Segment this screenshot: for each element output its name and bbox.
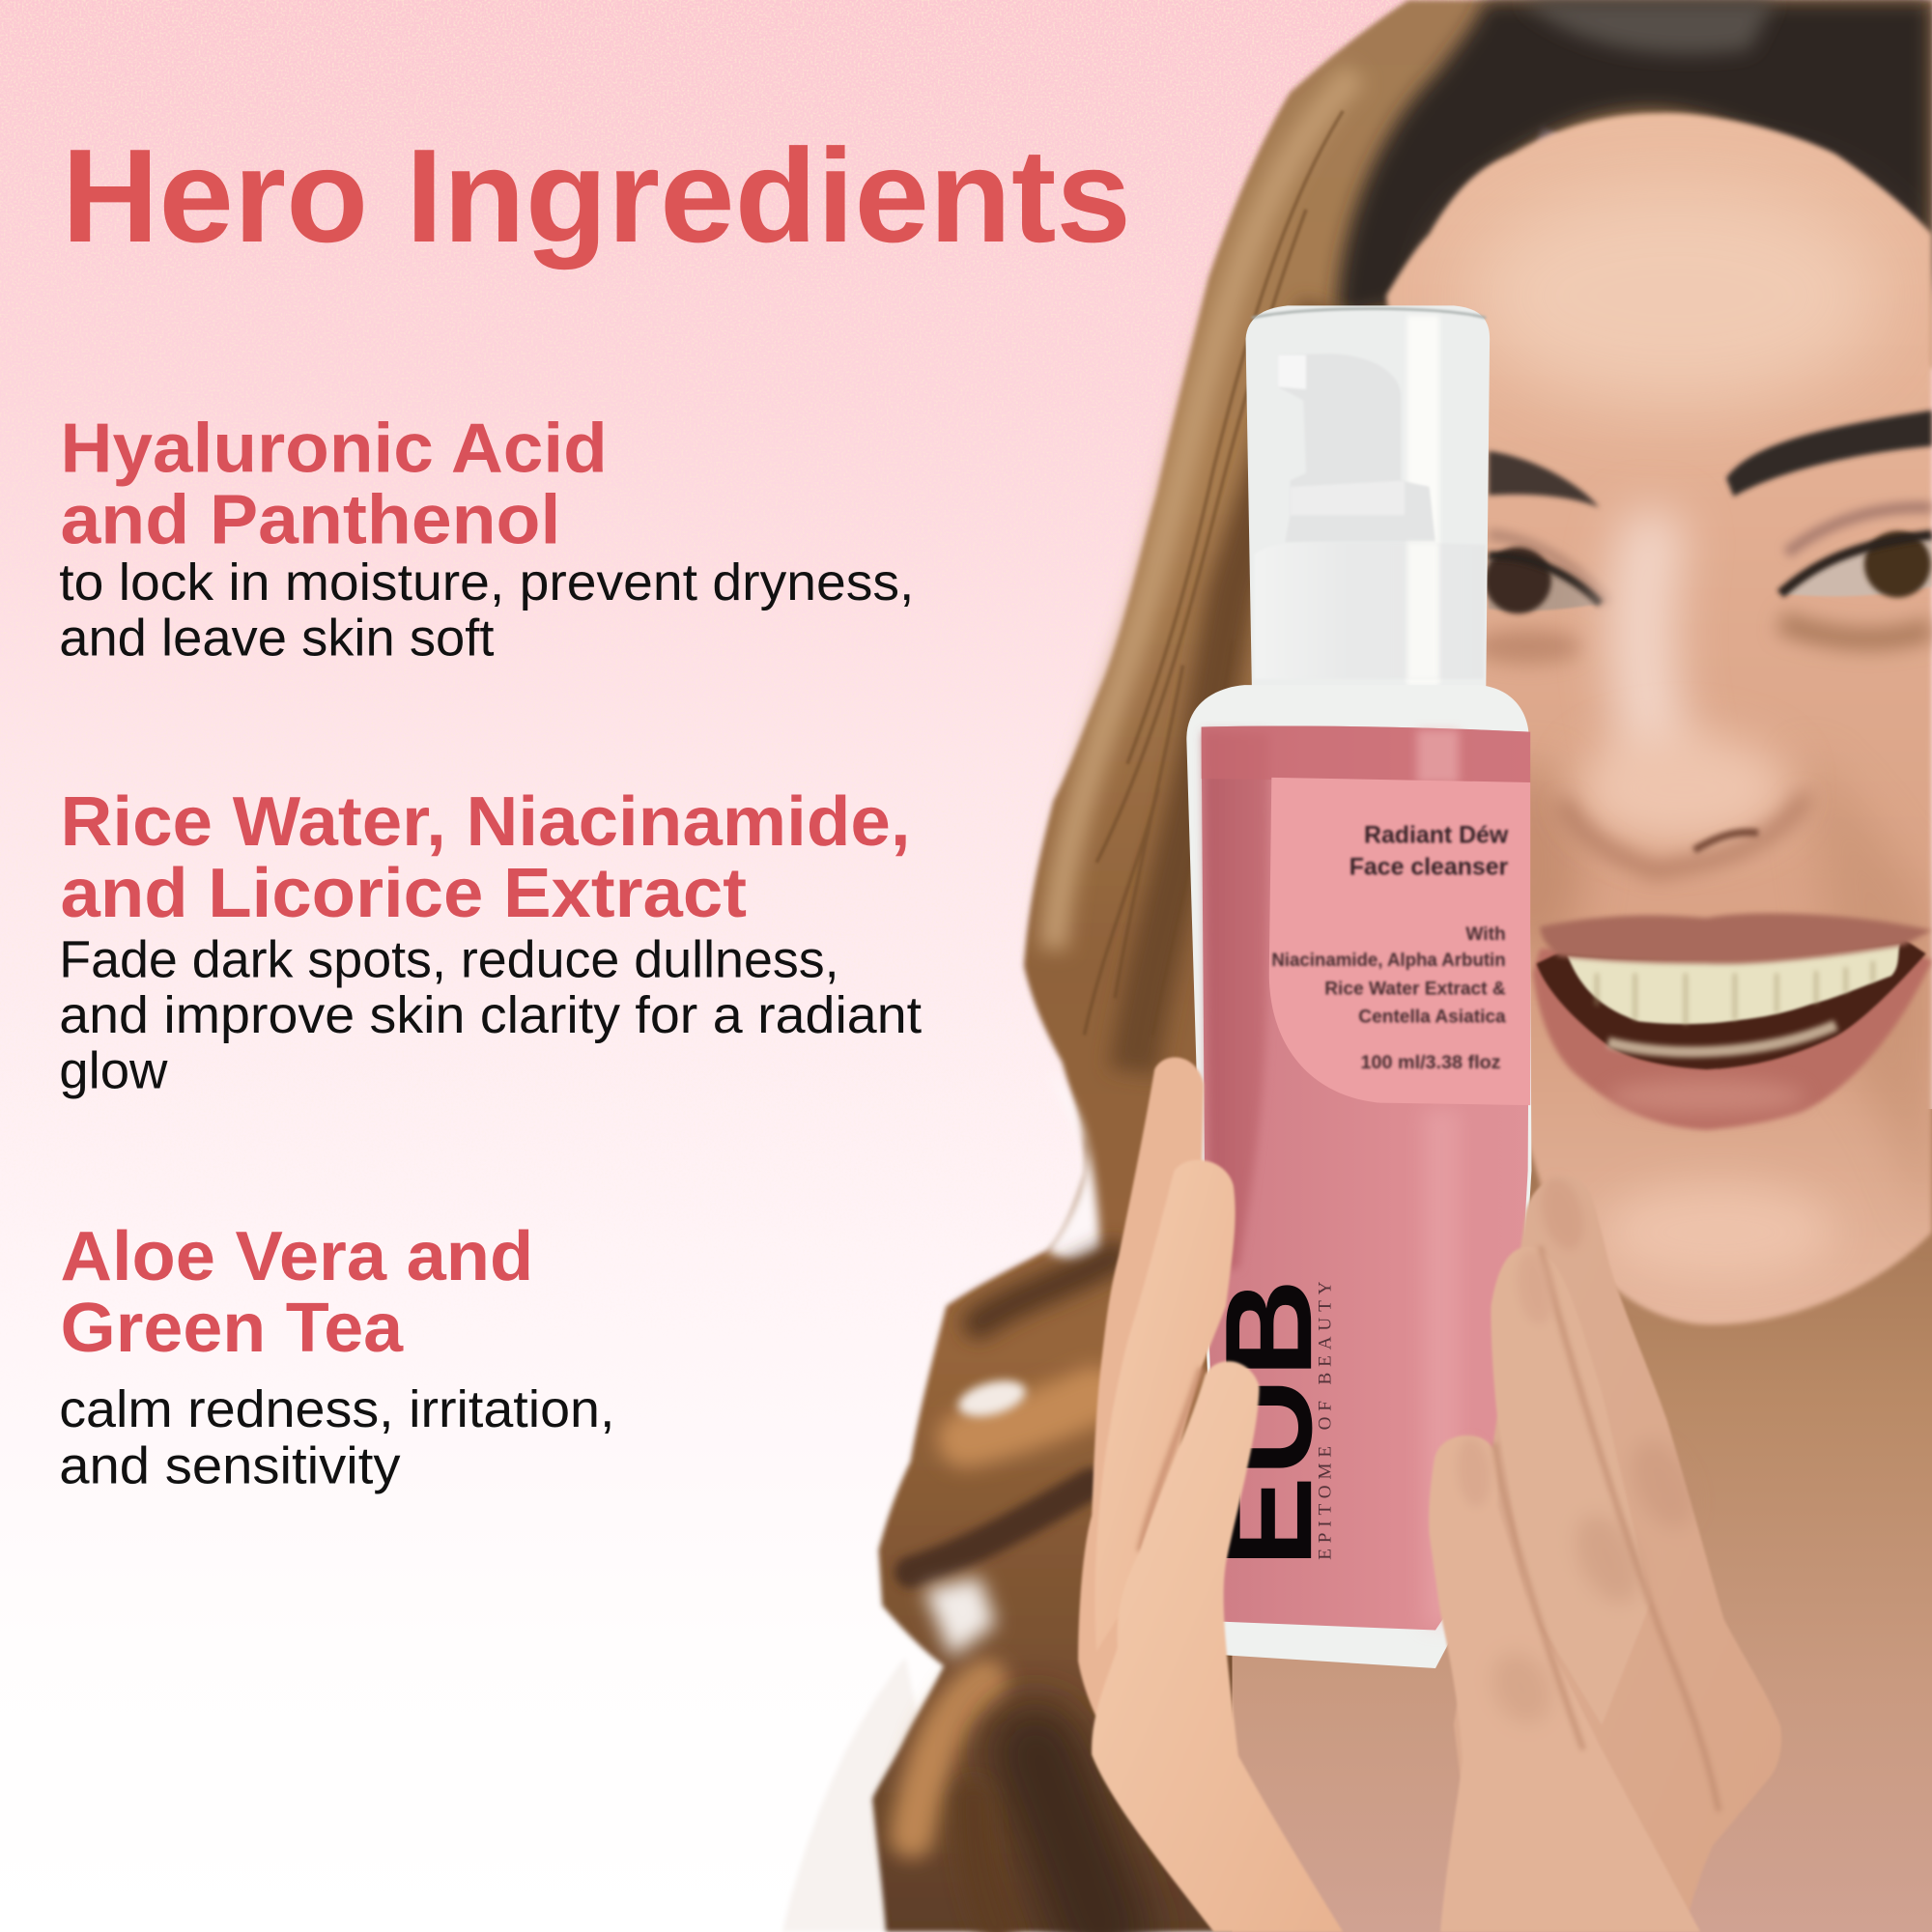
label left strip — [1204, 732, 1269, 1269]
clear cap — [1246, 305, 1490, 690]
bright gaps between curls — [954, 1374, 1030, 1423]
neck — [1233, 1109, 1932, 1932]
label top band — [1202, 726, 1530, 783]
bottle — [1186, 305, 1531, 1668]
fingertips — [1534, 1173, 1591, 1255]
label text: With — [1465, 924, 1506, 945]
ingredient name: Rice Water, Niacinamide, — [60, 782, 911, 861]
label — [1202, 726, 1530, 1631]
ingredient benefit — [59, 931, 922, 1099]
label highlights — [1417, 729, 1459, 783]
upper lip — [1540, 913, 1932, 964]
finger separation lines — [1494, 1247, 1719, 1811]
label text: Face cleanser — [1350, 854, 1509, 881]
background gradient — [0, 0, 1932, 1428]
ingredient block: rice water — [59, 782, 922, 1099]
left fingers and palm — [1078, 1058, 1343, 1932]
brand logo: EUB — [1201, 1279, 1338, 1567]
ingredient benefit: Fade dark spots, reduce dullness, — [59, 931, 839, 988]
ingredient benefit: and improve skin clarity for a radiant — [59, 987, 922, 1044]
hair — [872, 0, 1932, 1932]
label panel — [1269, 778, 1530, 1105]
fine hair strands — [1084, 111, 1343, 1035]
label text: Rice Water Extract & — [1324, 979, 1506, 999]
ingredient block: aloe vera — [59, 1217, 614, 1495]
lower lip — [1533, 949, 1932, 1130]
ingredient benefit: and leave skin soft — [59, 611, 495, 668]
inner hair shading — [1133, 308, 1324, 1072]
ingredient name: Hyaluronic Acid — [60, 410, 608, 488]
ingredient benefit — [59, 554, 914, 668]
label text: 100 ml/3.38 floz — [1361, 1052, 1501, 1073]
mouth — [1533, 913, 1932, 1130]
bottle body — [1186, 685, 1531, 1668]
label text: Radiant Déw — [1364, 821, 1509, 848]
eyes — [1472, 507, 1932, 665]
ingredient benefit — [59, 1381, 614, 1495]
ingredient name: and Licorice Extract — [60, 854, 747, 932]
white shirt — [782, 1658, 961, 1932]
lower teeth — [1608, 1025, 1836, 1052]
ingredient benefit: calm redness, irritation, — [59, 1381, 614, 1438]
ingredient name — [60, 782, 911, 932]
knuckles — [1619, 1431, 1708, 1539]
hand — [1078, 1058, 1781, 1932]
ingredient block: hyaluronic acid — [59, 410, 914, 668]
upper teeth — [1567, 943, 1900, 1024]
ingredient benefit: glow — [59, 1042, 168, 1099]
face — [1386, 113, 1932, 1324]
mouth interior — [1537, 936, 1926, 1069]
title: Hero Ingredients — [62, 122, 1131, 270]
eyebrows — [1489, 411, 1932, 508]
label text: Centella Asiatica — [1358, 1008, 1506, 1028]
pump nozzle and stem — [1278, 354, 1435, 542]
ingredient benefit: to lock in moisture, prevent dryness, — [59, 554, 914, 611]
label text: Niacinamide, Alpha Arbutin — [1271, 951, 1506, 971]
ingredient name — [60, 410, 608, 558]
white gap in hair — [1046, 1072, 1100, 1261]
dark hair at crown — [1337, 0, 1932, 321]
nose — [1562, 542, 1806, 871]
ingredient name: Aloe Vera and — [60, 1217, 533, 1295]
ingredient name — [60, 1217, 533, 1367]
label text — [1271, 821, 1509, 1073]
ingredient name: Green Tea — [60, 1289, 404, 1367]
face shading — [1466, 185, 1932, 1282]
pump collar — [1254, 542, 1486, 679]
wavy strands — [966, 1395, 1094, 1439]
ingredient benefit: and sensitivity — [59, 1438, 401, 1495]
brand logo: EPITOME OF BEAUTY — [1316, 1281, 1336, 1560]
ingredient name: and Panthenol — [60, 480, 560, 558]
photo: woman holding bottle — [782, 0, 1932, 1932]
right fingers and palm — [1429, 1173, 1781, 1932]
